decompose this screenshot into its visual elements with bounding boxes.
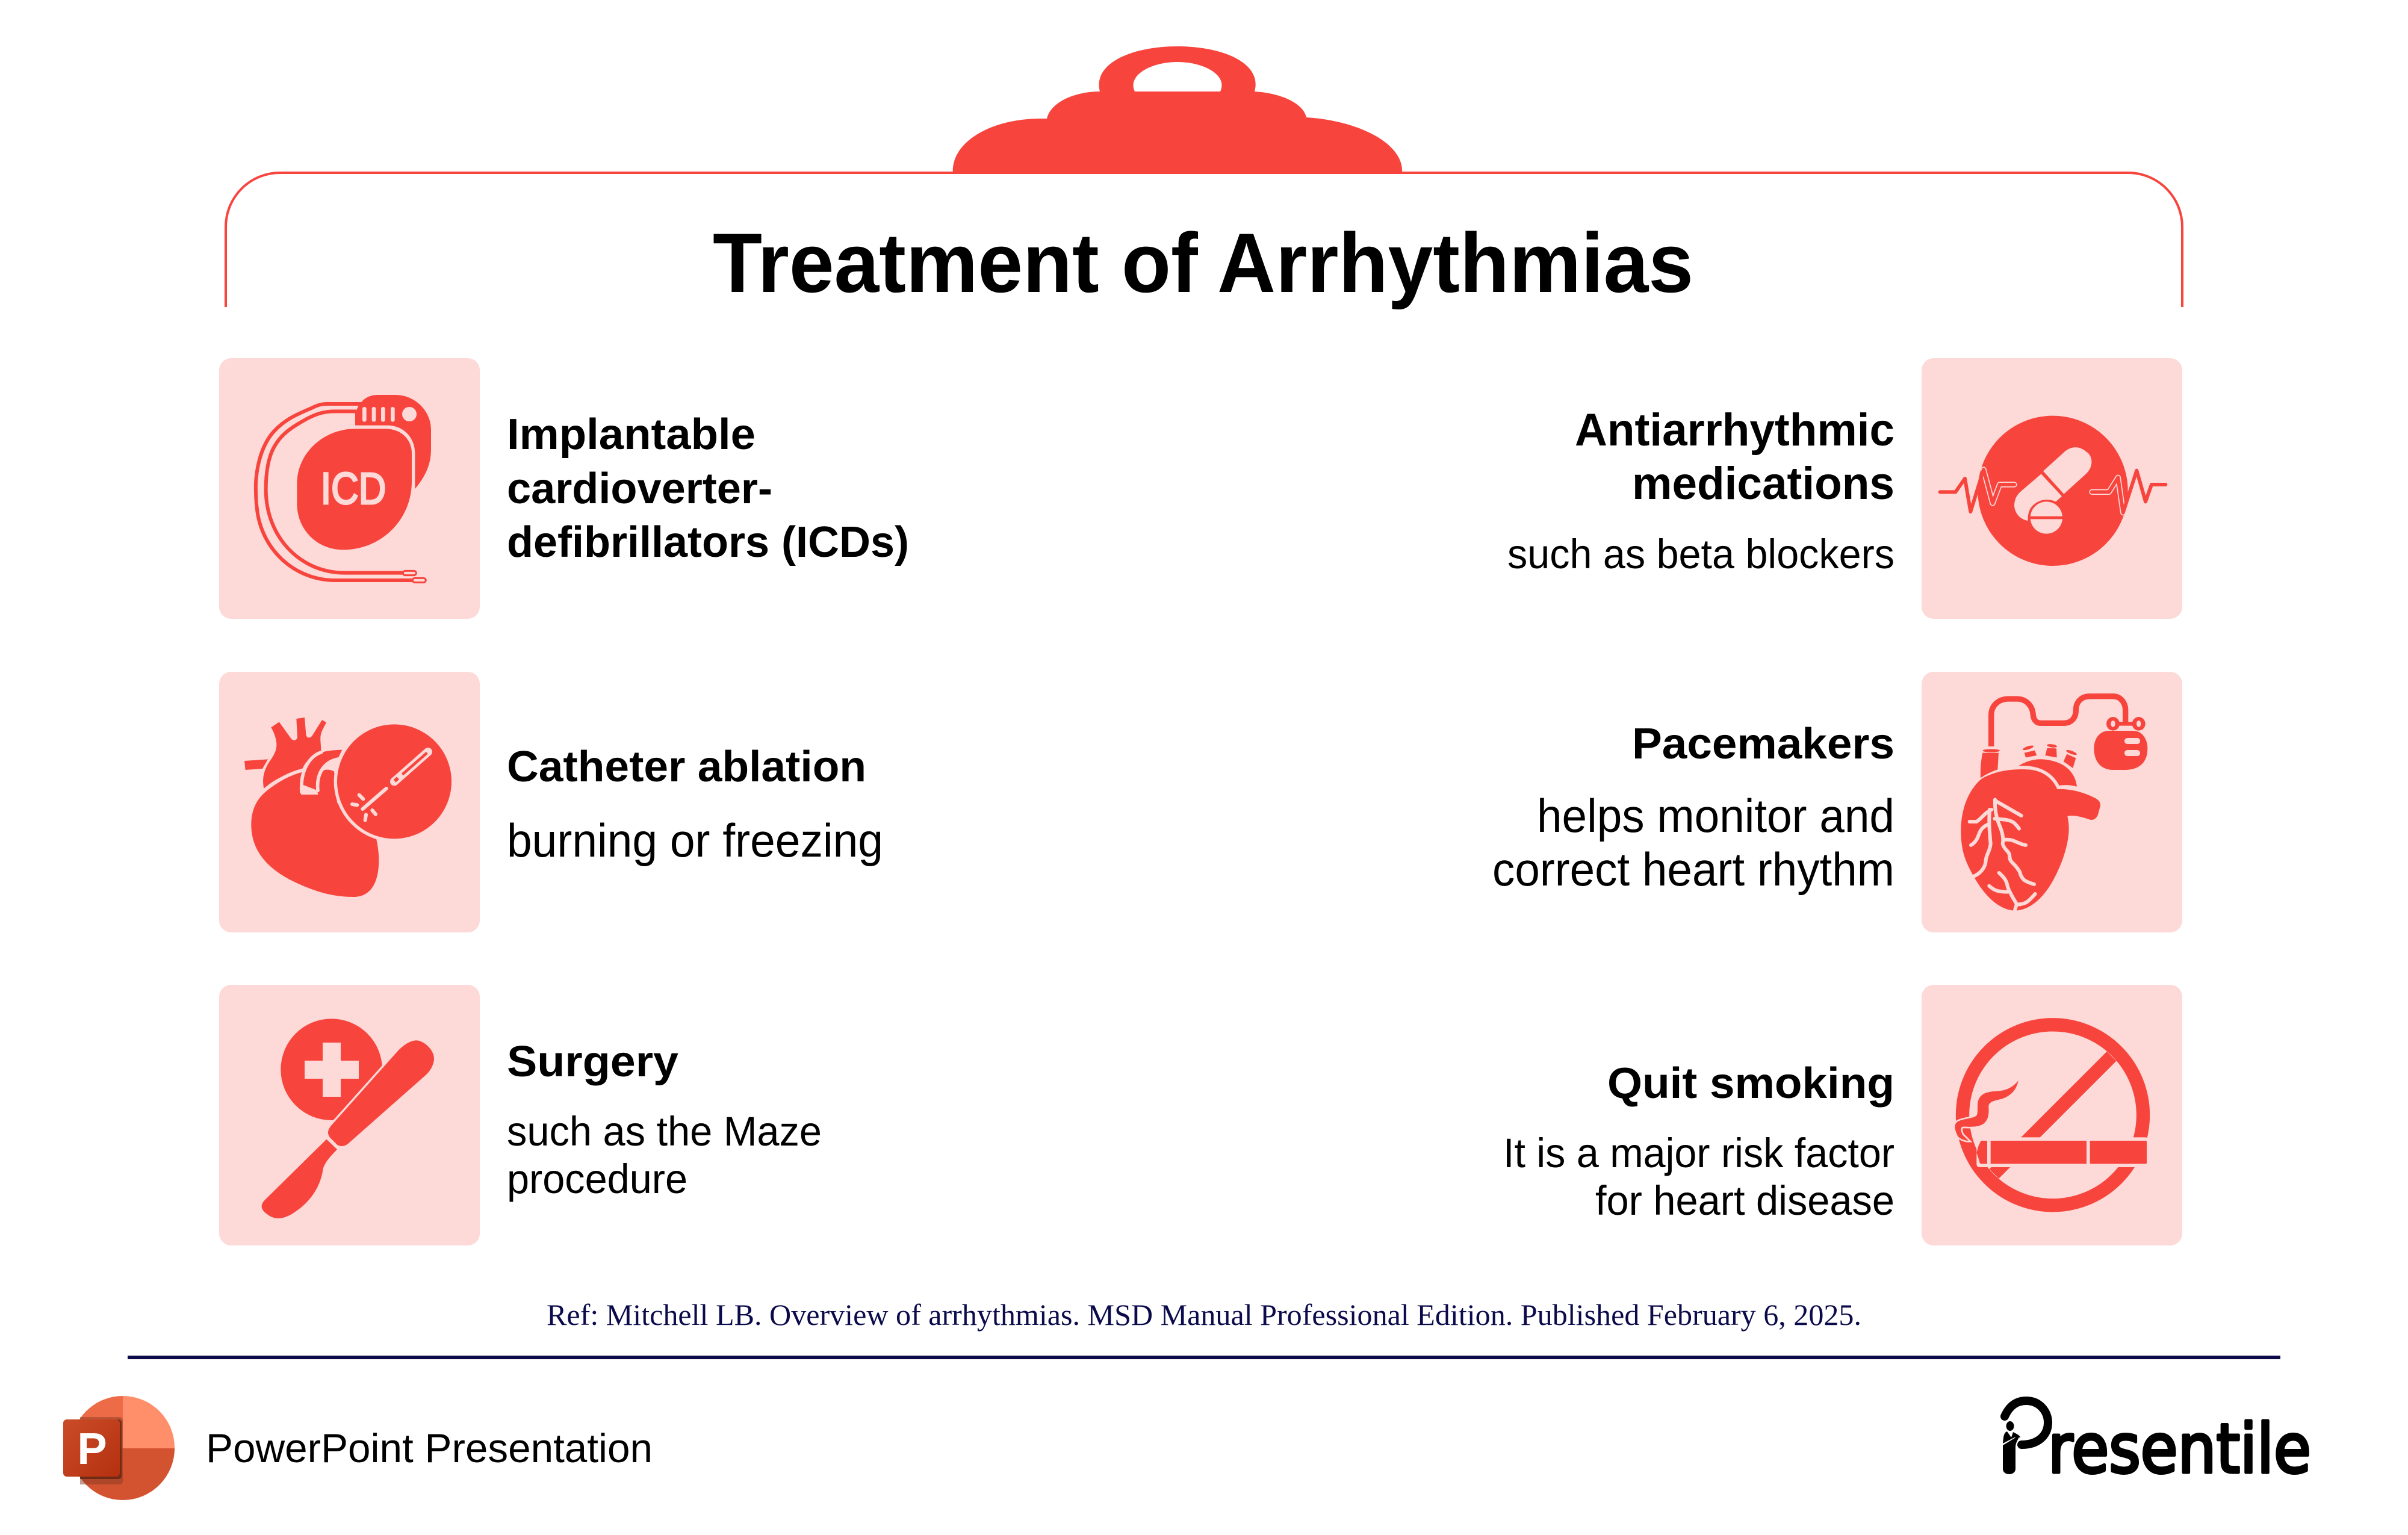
text: catheter ablation: Catheter ablation [507,743,866,791]
text: quit smoking: Quit smoking [1607,1059,1894,1108]
text: pacemakers [1492,720,1894,896]
text: quit smoking: It is a major risk factor [1503,1130,1894,1176]
text: medications: Antiarrhythmic [1575,405,1894,456]
panel: ICD icon [219,358,480,619]
text: ICD heading [507,411,909,566]
panel: pacemaker icon [1922,672,2182,932]
text: surgery: procedure [507,1156,687,1202]
panel: surgery icon [219,985,480,1245]
icon: PowerPoint logo [63,1396,175,1500]
text: pacemakers: correct heart rhythm [1492,843,1894,896]
text: catheter ablation: burning or freezing [507,814,883,867]
text: ICD heading: Implantable [507,411,756,459]
icon: PowerPoint logo: P [77,1424,107,1474]
panel: catheter ablation icon [219,672,480,932]
footer label: PowerPoint Presentation [206,1425,653,1471]
text: medications: medications [1632,458,1894,509]
text: medications: such as beta blockers [1507,531,1894,577]
reference citation: Ref: Mitchell LB. Overview of arrhythmias. MSD Manual Professional Edition. Published February 6, 2025. [547,1298,1861,1332]
panel: ICD icon: ICD [321,464,386,513]
panel: quit smoking icon [1922,985,2182,1245]
text: quit smoking: for heart disease [1595,1177,1894,1224]
text: ICD heading: cardioverter- [507,465,772,513]
text: surgery [507,1038,822,1202]
title: Treatment of Arrhythmias [713,216,1693,310]
text: ICD heading: defibrillators (ICDs) [507,518,909,566]
text: surgery: Surgery [507,1038,678,1086]
text: pacemakers: Pacemakers [1632,720,1894,768]
logo: Presentile: resentile [2048,1409,2311,1489]
clipboard frame with clip [226,46,2182,307]
text: catheter ablation [507,743,883,867]
text: pacemakers: helps monitor and [1537,789,1894,842]
text: surgery: such as the Maze [507,1108,822,1155]
panel: medications icon [1922,358,2182,619]
text: medications [1507,405,1894,577]
text: quit smoking [1503,1059,1894,1224]
